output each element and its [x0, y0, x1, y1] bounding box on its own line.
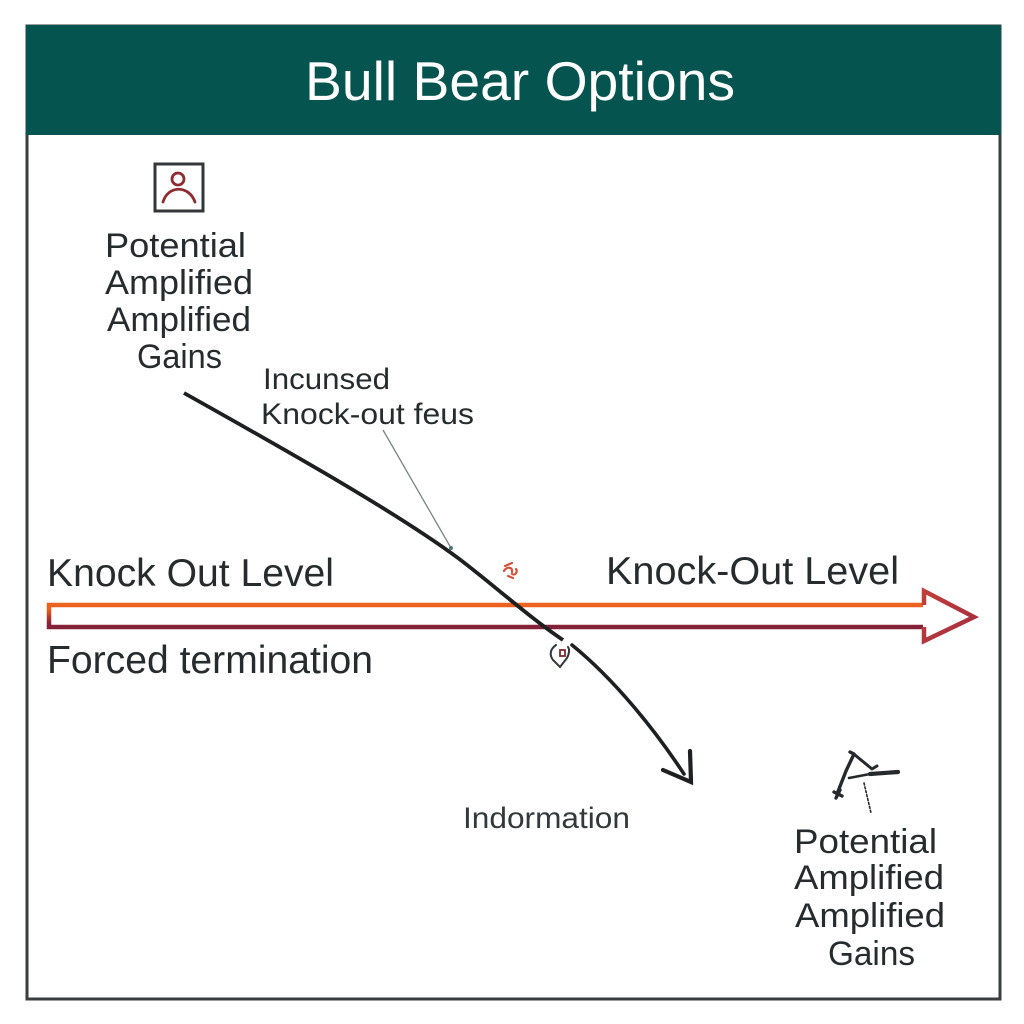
label: information: Indormation: [463, 802, 630, 835]
arrow: knock-out level bar: [49, 591, 974, 641]
text block: top-left potential gains: Potential: [105, 227, 246, 265]
icon: person in square: [155, 164, 203, 211]
callout text: knock-out fees: Incunsed: [263, 363, 390, 396]
text block: bottom-right potential gains: Potential: [794, 823, 937, 861]
title: Bull Bear Options: [305, 50, 735, 112]
descending price curve: [184, 393, 563, 640]
descending price curve lower segment with arrowhead: [572, 645, 691, 782]
icon: drafting compass sketch: [834, 752, 898, 813]
callout leader line: [383, 430, 453, 550]
label: knock-out level right: Knock-Out Level: [606, 550, 899, 593]
text block: top-left potential gains: Gains: [137, 338, 222, 376]
text block: bottom-right potential gains: Gains: [828, 935, 915, 973]
label: knock out level left: Knock Out Level: [47, 552, 334, 595]
callout text: knock-out fees: Knock-out feus: [261, 398, 474, 431]
text block: top-left potential gains: Amplified: [107, 301, 251, 339]
label: forced termination: Forced termination: [47, 639, 373, 682]
small red marker icon: [504, 563, 517, 578]
text block: bottom-right potential gains: [794, 823, 945, 973]
text block: bottom-right potential gains: Amplified: [795, 897, 945, 935]
text block: top-left potential gains: [105, 227, 253, 376]
text block: bottom-right potential gains: Amplified: [794, 859, 944, 897]
text block: top-left potential gains: Amplified: [105, 264, 253, 302]
icon: pin marker on curve: [551, 645, 569, 667]
callout text: knock-out fees: [261, 363, 474, 431]
header band: [26, 25, 1001, 135]
